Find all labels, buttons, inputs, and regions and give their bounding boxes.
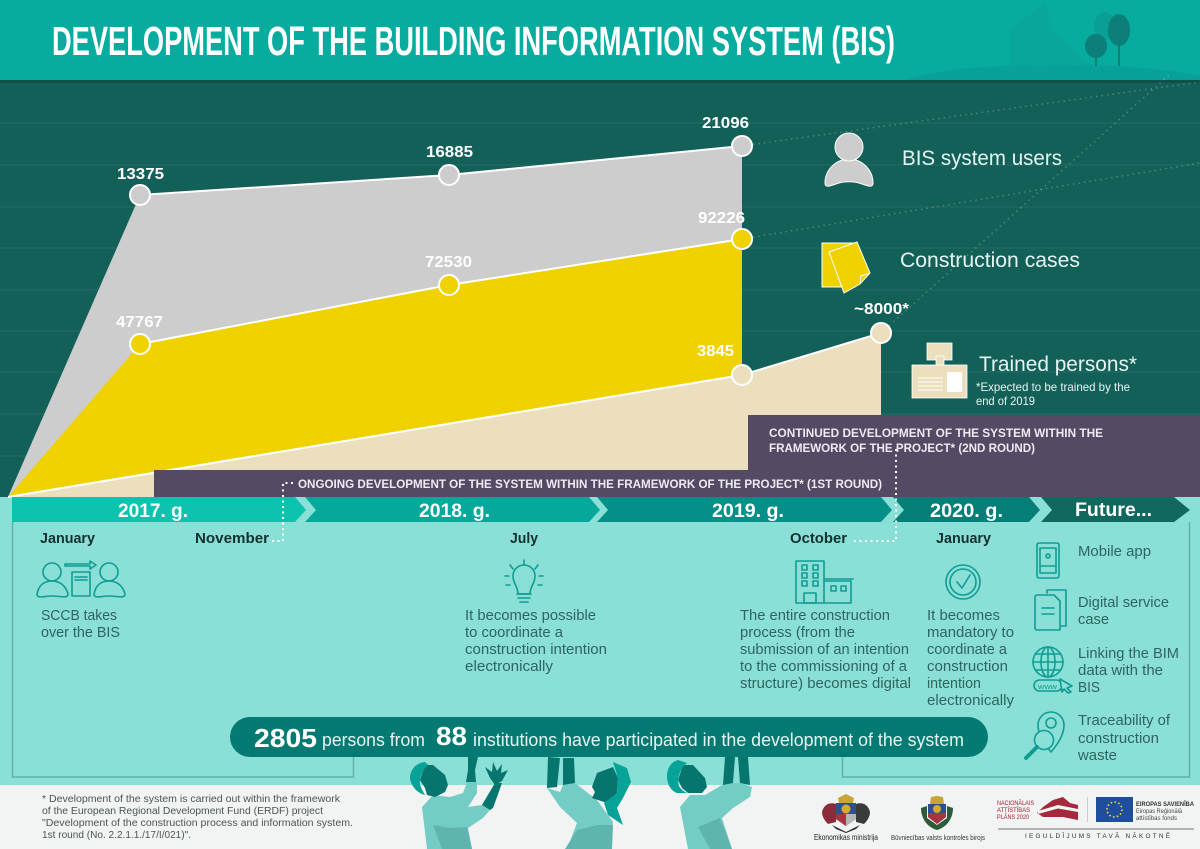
logo: State Construction Control Bureau: Būvniecības valsts kontroles birojs xyxy=(891,835,985,842)
area chart xyxy=(8,115,910,497)
participation pill: institutions have participated in the development of the system xyxy=(473,730,964,750)
logo: European Union: attīstības fonds xyxy=(1136,816,1177,822)
legend: BIS system users: BIS system users xyxy=(902,147,1062,170)
future: traceability of waste xyxy=(1026,712,1171,764)
milestone: October 2019 xyxy=(740,531,911,692)
panel outline xyxy=(12,522,1190,777)
icon: pin and magnifier xyxy=(1026,712,1064,758)
logo: National Development Plan 2020 xyxy=(997,797,1078,821)
icon: handover xyxy=(37,561,125,597)
future: linking BIM data: Linking the BIM xyxy=(1078,646,1179,662)
footnote xyxy=(42,794,353,841)
milestone: October 2019: process (from the xyxy=(740,625,855,641)
segment: future xyxy=(1041,497,1190,522)
segment: 2017 xyxy=(12,497,306,522)
area: trained persons xyxy=(8,333,881,497)
participation pill xyxy=(230,717,988,757)
value labels: 21096 xyxy=(702,115,749,132)
banner text: 1st round: ONGOING DEVELOPMENT OF THE SYSTEM WITHIN THE FRAMEWORK OF THE PROJECT* (1ST ROUND) xyxy=(298,479,882,491)
logo: Ministry of Economics xyxy=(814,794,879,842)
future: digital service case: Digital service xyxy=(1078,595,1169,611)
milestone: January 2020: mandatory to xyxy=(927,625,1014,641)
footnote: "Development of the construction process and information system. xyxy=(42,818,353,829)
logo: Ministry of Economics: Ekonomikas ministrija xyxy=(814,833,879,842)
background: footer xyxy=(0,785,1200,849)
value labels: 72530 xyxy=(425,254,472,271)
logo: National Development Plan 2020: NACIONĀLAIS xyxy=(997,799,1034,807)
legend: construction cases xyxy=(822,242,1080,293)
future: digital service case xyxy=(1035,590,1169,630)
logo: European Union xyxy=(1096,797,1194,822)
future: linking BIM data: data with the xyxy=(1078,663,1163,679)
data points: users xyxy=(130,136,752,205)
area: construction cases xyxy=(8,239,742,497)
milestone: July 2018: construction intention xyxy=(465,642,607,658)
future: linking BIM data: www xyxy=(1037,684,1058,691)
banner text: 2nd round: CONTINUED DEVELOPMENT OF THE SYSTEM WITHIN THE xyxy=(769,428,1103,440)
participation pill: 2805 xyxy=(254,723,317,753)
future: mobile app xyxy=(1037,543,1151,578)
milestone: January 2020: January xyxy=(936,531,991,547)
milestone: October 2019: October xyxy=(790,531,847,547)
timeline bar: 2017. g. xyxy=(118,501,188,522)
future: traceability of waste: construction xyxy=(1078,731,1159,747)
value labels: 3845 xyxy=(697,343,734,360)
milestone: January 2020: coordinate a xyxy=(927,642,1008,658)
future: traceability of waste: waste xyxy=(1077,748,1117,764)
logo: State Construction Control Bureau xyxy=(891,796,985,842)
segment: 2019 xyxy=(597,497,892,522)
milestone: January 2017: January xyxy=(40,531,95,547)
milestone: January 2020: intention xyxy=(927,676,981,692)
legend: trained persons: *Expected to be trained by the xyxy=(976,380,1130,394)
project phases banner xyxy=(154,415,1200,497)
value labels: 13375 xyxy=(117,166,164,183)
milestone: October 2019: to the commissioning of a xyxy=(740,659,908,675)
milestone: January 2017: SCCB takes xyxy=(41,608,117,624)
icon: check mark xyxy=(946,565,980,599)
icon: phone xyxy=(1037,543,1059,578)
milestone: October 2019: structure) becomes digital xyxy=(740,676,911,692)
dotted connector: October xyxy=(854,448,896,541)
milestone: July 2018: It becomes possible xyxy=(465,608,596,624)
future: digital service case: case xyxy=(1078,612,1109,628)
timeline bar: 2018. g. xyxy=(419,501,490,522)
milestone: January 2020: construction xyxy=(927,659,1008,675)
milestone: January 2020: It becomes xyxy=(927,608,1000,624)
milestone: October 2019: The entire construction xyxy=(740,608,890,624)
banner text: 2nd round xyxy=(769,428,1103,455)
icon: globe and www xyxy=(1033,647,1072,693)
future: traceability of waste: Traceability of xyxy=(1078,713,1171,729)
value labels: 16885 xyxy=(426,144,473,161)
future list xyxy=(1026,543,1179,764)
icon: badge xyxy=(912,343,967,398)
figure: person three xyxy=(667,757,752,849)
legend: construction cases: Construction cases xyxy=(900,249,1080,272)
background: timeline panel xyxy=(0,497,1200,785)
future: linking BIM data: BIS xyxy=(1078,680,1100,696)
milestone: July 2018: July xyxy=(510,531,538,547)
legend: trained persons: end of 2019 xyxy=(976,394,1035,408)
area: BIS system users xyxy=(8,146,742,497)
figure: person two xyxy=(547,757,631,849)
icon: documents xyxy=(822,242,870,293)
future: mobile app: Mobile app xyxy=(1078,544,1151,560)
participation pill: 88 xyxy=(436,721,467,751)
timeline bar: 2020. g. xyxy=(930,501,1003,522)
header band xyxy=(0,0,1200,80)
timeline bar: 2019. g. xyxy=(712,501,784,522)
icon: buildings xyxy=(796,561,853,603)
logo: National Development Plan 2020: PLĀNS 2020 xyxy=(997,813,1029,821)
footnote: of the European Regional Development Fund (ERDF) project xyxy=(42,806,323,817)
logo: National Development Plan 2020: ATTĪSTĪBAS xyxy=(997,806,1031,814)
milestone: July 2018: to coordinate a xyxy=(465,625,564,641)
icon: folder document xyxy=(1035,590,1066,630)
legend: trained persons: Trained persons* xyxy=(979,353,1137,376)
value labels: ~8000* xyxy=(854,301,910,318)
milestone: January 2020: electronically xyxy=(927,693,1015,709)
future: linking BIM data xyxy=(1033,646,1179,696)
legend: BIS system users xyxy=(825,133,1062,186)
data points: cases xyxy=(130,229,752,354)
segment: 2018 xyxy=(305,497,600,522)
data points: trained xyxy=(732,323,891,385)
icon: user xyxy=(825,133,873,186)
milestone: November 2017: November xyxy=(195,531,269,547)
participation pill: persons from xyxy=(322,730,425,750)
header decoration: buildings and trees xyxy=(905,2,1200,80)
dotted connector: November xyxy=(272,483,296,541)
chart panel background xyxy=(0,74,1200,497)
icon: light bulb xyxy=(505,560,543,602)
timeline bar xyxy=(12,497,1190,522)
milestone: October 2019: submission of an intention xyxy=(740,642,909,658)
value labels xyxy=(116,115,910,360)
logo strip divider and slogan: IEGULDĪJUMS TAVĀ NĀKOTNĒ xyxy=(1025,832,1170,840)
banner text: 2nd round: FRAMEWORK OF THE PROJECT* (2ND ROUND) xyxy=(769,443,1035,455)
milestone: July 2018: electronically xyxy=(465,659,554,675)
milestone: July 2018 xyxy=(465,531,607,675)
milestone: January 2017: over the BIS xyxy=(41,625,120,641)
milestone: January 2020 xyxy=(927,531,1015,709)
milestone: January 2017 xyxy=(37,531,125,641)
logo: European Union: Eiropas Reģionālā xyxy=(1136,808,1183,815)
footnote: * Development of the system is carried out within the framework xyxy=(42,794,341,805)
value labels: 47767 xyxy=(116,314,163,331)
segment: 2020 xyxy=(893,497,1040,522)
footnote: 1st round (No. 2.2.1.1./17/I/021)". xyxy=(42,830,191,841)
timeline bar: Future... xyxy=(1075,500,1152,521)
figure: person one xyxy=(410,757,508,849)
legend: trained persons xyxy=(912,343,1137,408)
value labels: 92226 xyxy=(698,210,745,227)
